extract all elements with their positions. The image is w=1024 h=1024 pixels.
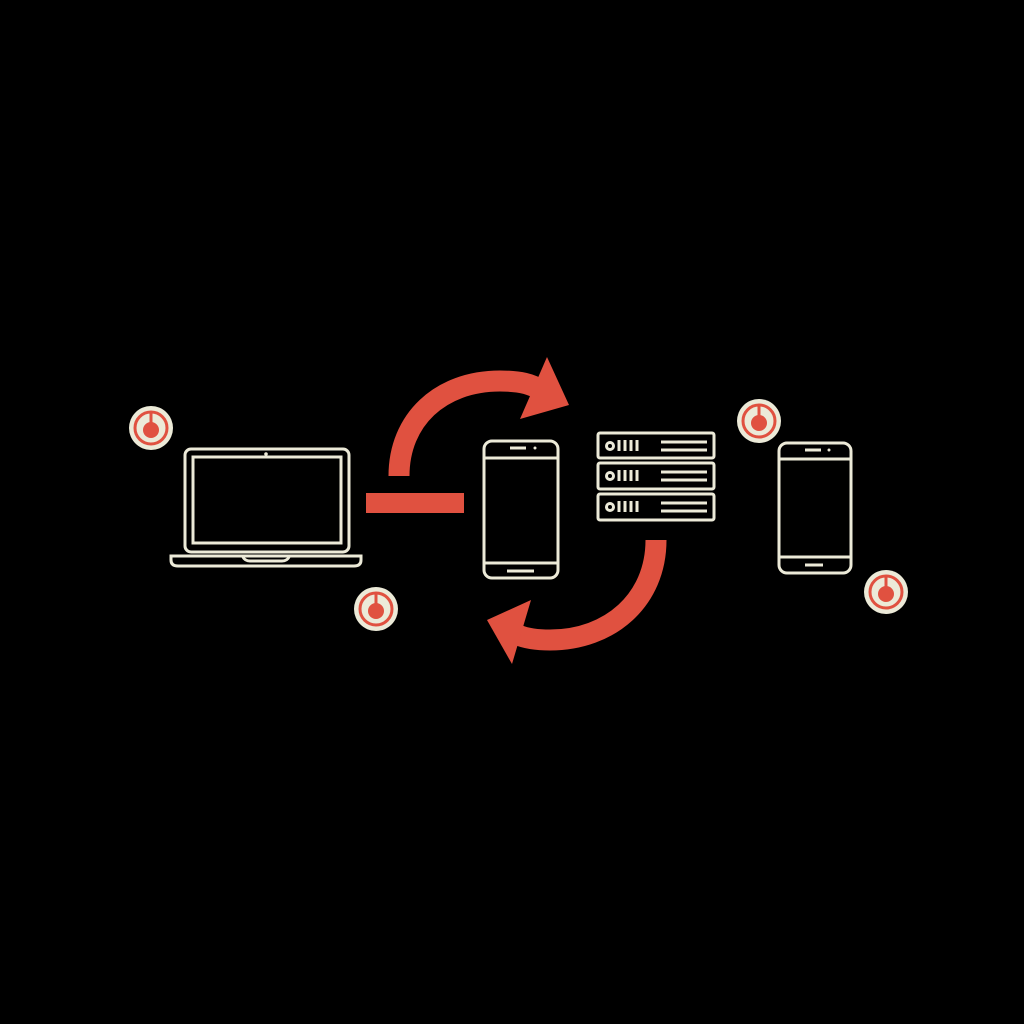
icon: phone 2 (779, 443, 851, 573)
arrow: top curved (399, 357, 569, 476)
icon: phone 1 (484, 441, 558, 578)
icon: server stack (598, 433, 714, 520)
connector bar (366, 493, 464, 513)
icon: power button bottom-right (864, 570, 908, 614)
icon: power button top-left (129, 406, 173, 450)
arrow: bottom curved (487, 540, 656, 664)
icon: laptop (171, 449, 361, 566)
icon: power button bottom-left (354, 587, 398, 631)
icon: power button top-right (737, 399, 781, 443)
